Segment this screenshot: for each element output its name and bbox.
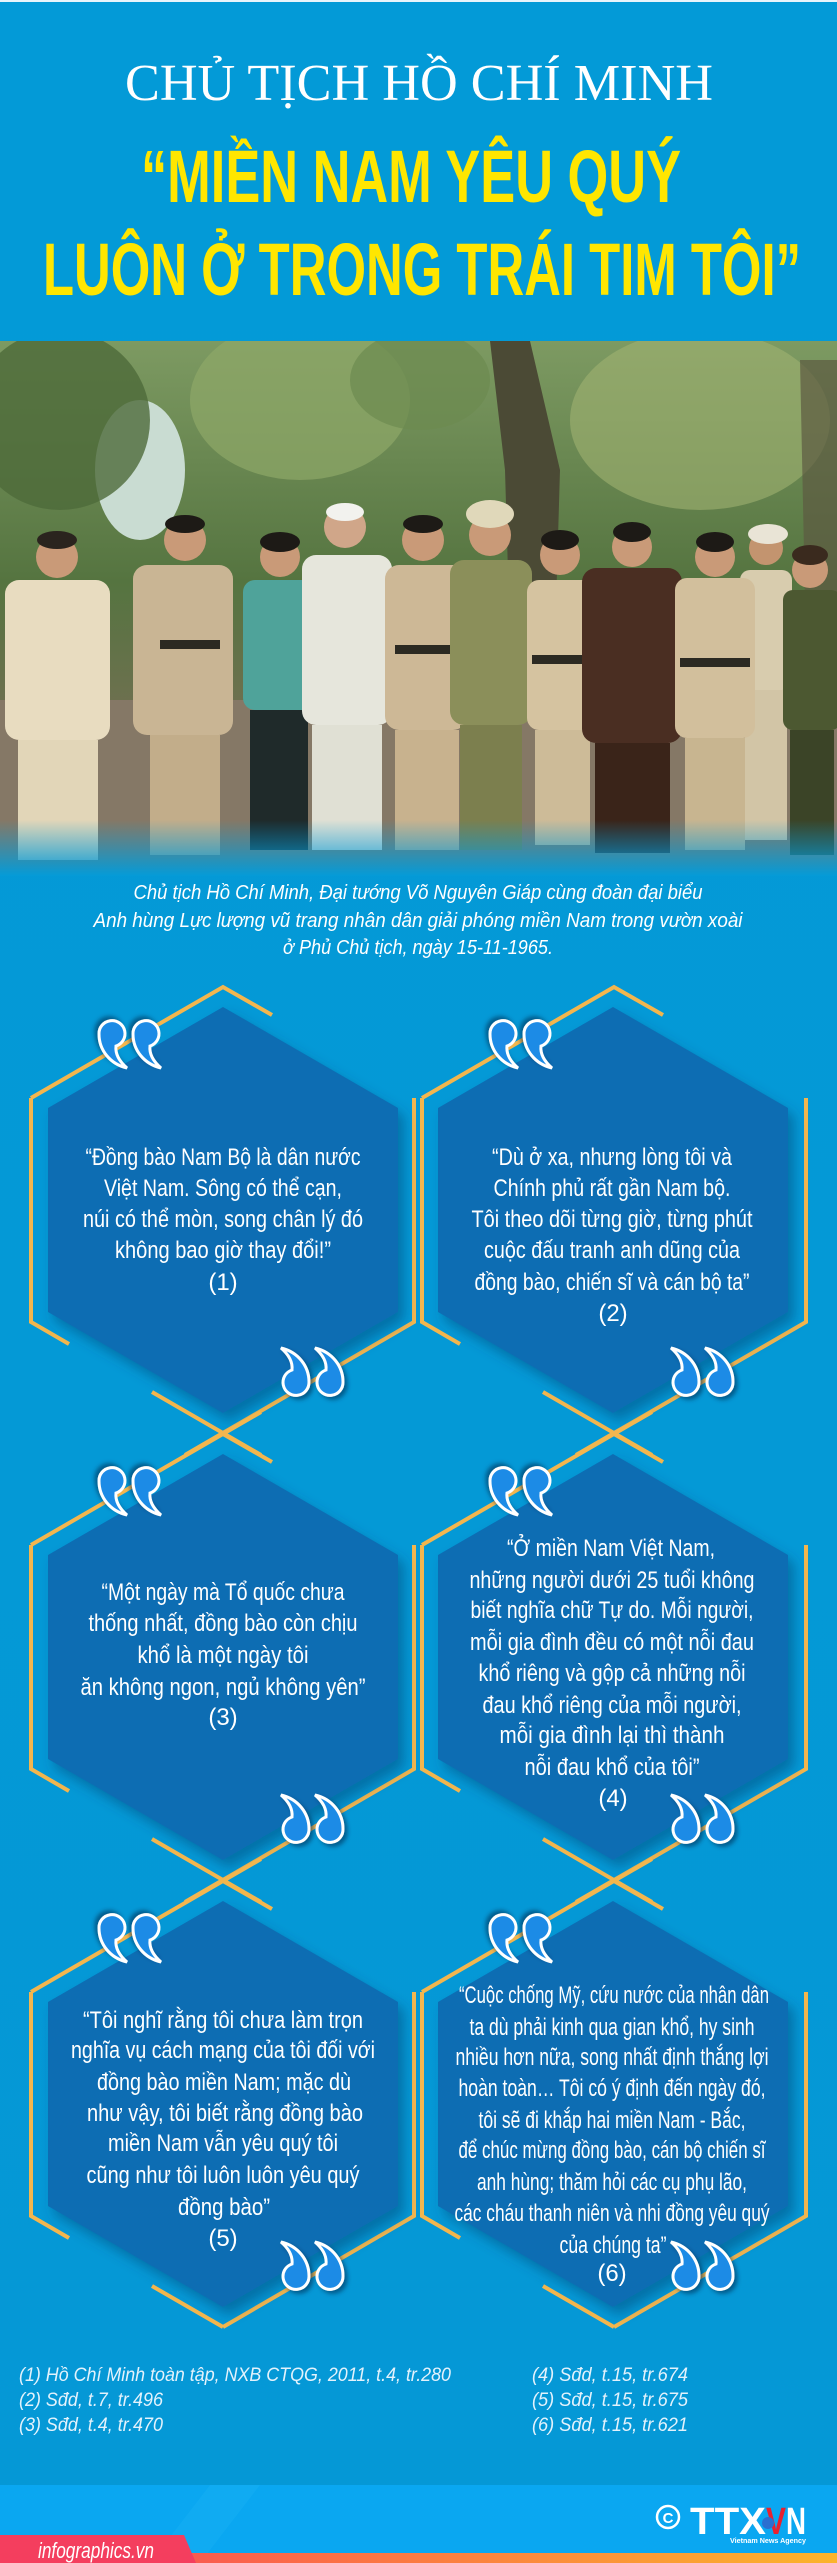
panel: quote 4: mỗi gia đình lại thì thành [500,1722,724,1749]
panel: quote 2: Chính phủ rất gần Nam bộ. [494,1175,730,1202]
logo: TTXVN: Vietnam News Agency [730,2538,806,2545]
logo: TTXVN: N [786,2501,806,2543]
panel: quote 5: nghĩa vụ cách mạng của tôi đối với [71,2037,375,2064]
logo: TTXVN [657,2501,806,2545]
panel: quote 3: ăn không ngon, ngủ không yên” [80,1674,366,1701]
logo: TTXVN: TTX [690,2501,767,2543]
panel: quote 1: không bao giờ thay đổi!” [115,1237,331,1264]
panel: quote 2: “Dù ở xa, nhưng lòng tôi và [492,1144,733,1171]
panel: quote 2: cuộc đấu tranh anh dũng của [484,1237,741,1264]
site name: infographics.vn [38,2538,154,2563]
logo: TTXVN: C [663,2510,674,2527]
panel: quote 2: (2) [598,1300,628,1327]
panel: quote 4: khổ riêng và gộp cả những nỗi [478,1660,746,1687]
footnotes: (4) Sđd, t.15, tr.674 [532,2365,688,2386]
panel: quote 4: “Ở miền Nam Việt Nam, [507,1533,715,1562]
panel: quote 6: của chúng ta” [560,2232,666,2259]
panel: quote 6: tôi sẽ đi khắp hai miền Nam - Bắc, [478,2107,746,2134]
panel: quote 5: đồng bào miền Nam; mặc dù [97,2069,351,2096]
panel: quote 2: Tôi theo dõi từng giờ, từng phút [472,1206,753,1233]
panel: quote 5 [31,1859,414,2327]
photo caption: Anh hùng Lực lượng vũ trang nhân dân giải phóng miền Nam trong vườn xoài [93,910,743,932]
panel: quote 2: đồng bào, chiến sĩ và cán bộ ta” [474,1269,750,1296]
footnotes: (2) Sđd, t.7, tr.496 [19,2390,163,2411]
panel: quote 4: mỗi gia đình đều có một nỗi đau [470,1629,754,1656]
photo caption: ở Phủ Chủ tịch, ngày 15-11-1965. [283,937,553,959]
panel: quote 1 [31,987,414,1455]
photo caption [93,882,743,959]
photo caption: Chủ tịch Hồ Chí Minh, Đại tướng Võ Nguyên Giáp cùng đoàn đại biểu [134,882,702,904]
logo: TTXVN: V [766,2501,787,2543]
panel: quote 4: nỗi đau khổ của tôi” [524,1754,700,1781]
footnotes: (5) Sđd, t.15, tr.675 [532,2390,688,2411]
panel: quote 1: Việt Nam. Sông có thể cạn, [104,1175,342,1202]
panel: quote 1: (1) [208,1269,238,1296]
panel: quote 3: (3) [208,1704,238,1731]
panel: quote 6 [422,1859,806,2327]
panel: quote 1: núi có thể mòn, song chân lý đó [83,1206,363,1233]
photo [0,320,837,876]
panel: quote 4 [422,1412,806,1902]
footer band [0,2485,837,2563]
panel: quote 5: (5) [208,2225,238,2252]
panel: quote 3: khổ là một ngày tôi [138,1642,308,1669]
panel: quote 1: “Đồng bào Nam Bộ là dân nước [86,1144,360,1171]
panel: quote 5: đồng bào” [178,2194,270,2221]
panel: quote 3: thống nhất, đồng bào còn chịu [88,1610,358,1637]
panel: quote 4: những người dưới 25 tuổi không [470,1567,754,1594]
panel: quote 3: “Một ngày mà Tổ quốc chưa [102,1579,345,1606]
footnotes: (6) Sđd, t.15, tr.621 [532,2415,688,2436]
front figures [5,500,755,860]
panel: quote 2 [422,987,806,1455]
panel: quote 3 [31,1412,414,1902]
panel: quote 5: như vậy, tôi biết rằng đồng bào [87,2100,363,2127]
panel: quote 5: “Tôi nghĩ rằng tôi chưa làm trọn [83,2007,363,2034]
panel: quote 4: biết nghĩa chữ Tự do. Mỗi người, [470,1597,754,1624]
headline quote [43,135,801,311]
back figures [740,524,837,855]
footnotes: (3) Sđd, t.4, tr.470 [19,2415,163,2436]
panel: quote 6: (6) [597,2260,627,2287]
footnotes: (1) Hồ Chí Minh toàn tập, NXB CTQG, 2011, t.4, tr.280 [19,2365,451,2386]
panel: quote 4: đau khổ riêng của mỗi người, [482,1692,742,1719]
panel: quote 5: cũng như tôi luôn luôn yêu quý [86,2162,360,2189]
title: Chủ tịch Hồ Chí Minh: CHỦ TỊCH HỒ CHÍ MINH [125,53,713,112]
panel: quote 5: miền Nam vẫn yêu quý tôi [108,2130,338,2157]
footnotes [19,2365,688,2436]
panel: quote 4: (4) [598,1785,628,1812]
